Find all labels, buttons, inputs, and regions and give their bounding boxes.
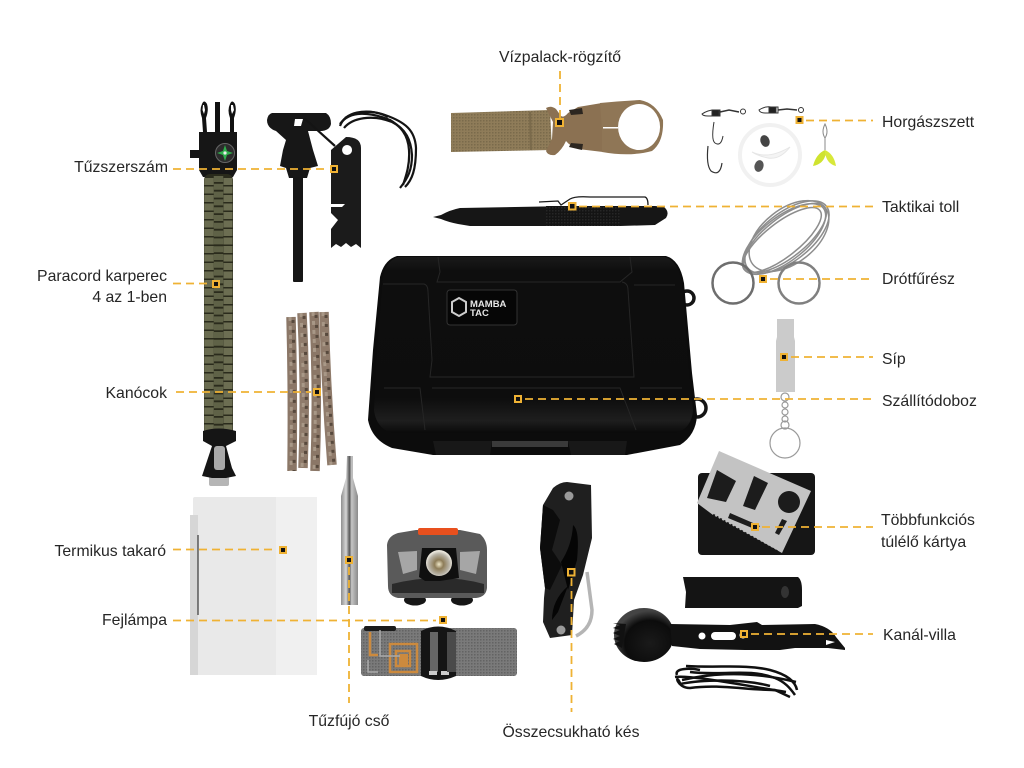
lower buckle [202,428,236,486]
buckle prongs [200,102,236,132]
label: wire saw: Drótfűrész [882,271,955,288]
carry case [368,256,706,455]
leader: fishing set [796,117,873,123]
lid ridges [383,257,682,430]
saw teeth [713,515,778,552]
buckle head with compass [190,132,237,177]
label: spork: Kanál-villa [883,627,956,644]
carabiner clip [576,572,592,636]
hook two [707,146,722,173]
headlamp [387,528,487,606]
bottle holder clip [451,100,663,155]
leader: knife [568,569,574,712]
line spool [740,125,800,185]
leader: survival card [752,524,873,530]
headlamp body [387,530,487,598]
folding knife [540,482,592,638]
scraper [331,137,361,248]
tactical pen [433,197,668,226]
black cord [675,666,797,697]
strap buckle [421,626,456,680]
front plate [419,548,459,581]
logo badge [447,290,517,325]
label: tactical pen: Taktikai toll [882,199,959,216]
label: survival card: Többfunkciós [881,512,975,529]
elastic band [361,628,517,676]
label: fishing set: Horgászszett [882,114,975,131]
label: headlamp: Fejlámpa [102,612,167,629]
blade side [540,505,562,590]
logo badge: TAC [470,308,489,319]
latches [433,441,627,455]
blanket sheet [193,497,317,675]
label: fire tube: Tűzfújó cső [309,713,390,730]
feet [404,594,473,606]
blade and handle [540,482,592,638]
leader: wire saw [760,276,873,282]
leader: fire steel [173,166,337,172]
lid [374,257,693,433]
webbing strap [451,110,552,152]
strap loops [680,291,706,417]
compass [216,144,234,162]
survival card [697,451,815,555]
knurled grip [546,206,620,226]
main lens [426,550,452,576]
orange button [418,528,458,535]
saw ring left [712,262,754,304]
wicks [290,312,334,471]
logo badge: MAMBA [470,299,507,310]
folded edge [190,515,198,675]
leader: paracord [173,281,219,287]
side LEDs [398,551,480,574]
cord loops [304,112,416,188]
orange embroidered logo [370,632,417,672]
label: fire steel: Tűzszerszám [74,159,168,176]
whistle silver [770,319,800,458]
clip [539,197,648,205]
leader: tactical pen [569,203,873,210]
handle [670,622,845,650]
lure [813,124,836,166]
pen body [433,206,668,226]
paracord bracelet [190,102,237,486]
thermal blanket [190,497,317,675]
saw ring right [778,262,820,304]
leader: spork [741,631,873,637]
wire saw [712,186,842,304]
steel card [697,451,811,553]
leader: wicks [176,389,320,395]
spork [613,608,845,662]
black whistle [683,577,802,608]
case silhouette [368,256,697,455]
leader: case [515,396,873,402]
fire blowing tube [341,456,358,605]
label: paracord bracelet: 4 az 1-ben [92,289,167,306]
braided cord [204,174,233,438]
bowl with tines [614,608,674,662]
leader: thermal blanket [173,547,286,553]
leader: headlamp [173,617,446,623]
pivot screws [556,492,574,634]
label: bottle clip: Vízpalack-rögzítő [499,49,621,66]
swivel two [759,107,804,113]
handle slots [552,525,578,620]
label: survival card: túlélő kártya [881,534,966,551]
wire coil [731,186,842,287]
label: case: Szállítódoboz [882,393,977,410]
headlamp strap [361,626,517,680]
rod [293,177,303,282]
leader: water bottle clip [556,71,563,126]
handle [267,113,331,178]
buckle [546,103,603,155]
hook one [713,122,723,144]
fire steel [267,112,416,282]
swivel one [702,109,746,116]
label: whistle: Síp [882,351,906,368]
card sleeve [698,473,815,555]
keychain [770,393,800,458]
label: thermal blanket: Termikus takaró [54,543,166,560]
cutouts [707,470,800,535]
label: wicks: Kanócok [106,385,167,402]
whistle body [776,319,795,392]
bottle ring [600,100,663,154]
label: knife: Összecsukható kés [503,723,640,741]
handle holes [698,632,835,645]
label: paracord bracelet: Paracord karperec [37,268,167,285]
fishing set [702,107,836,185]
leader: fire tube [346,557,352,703]
leader: whistle [781,354,873,360]
